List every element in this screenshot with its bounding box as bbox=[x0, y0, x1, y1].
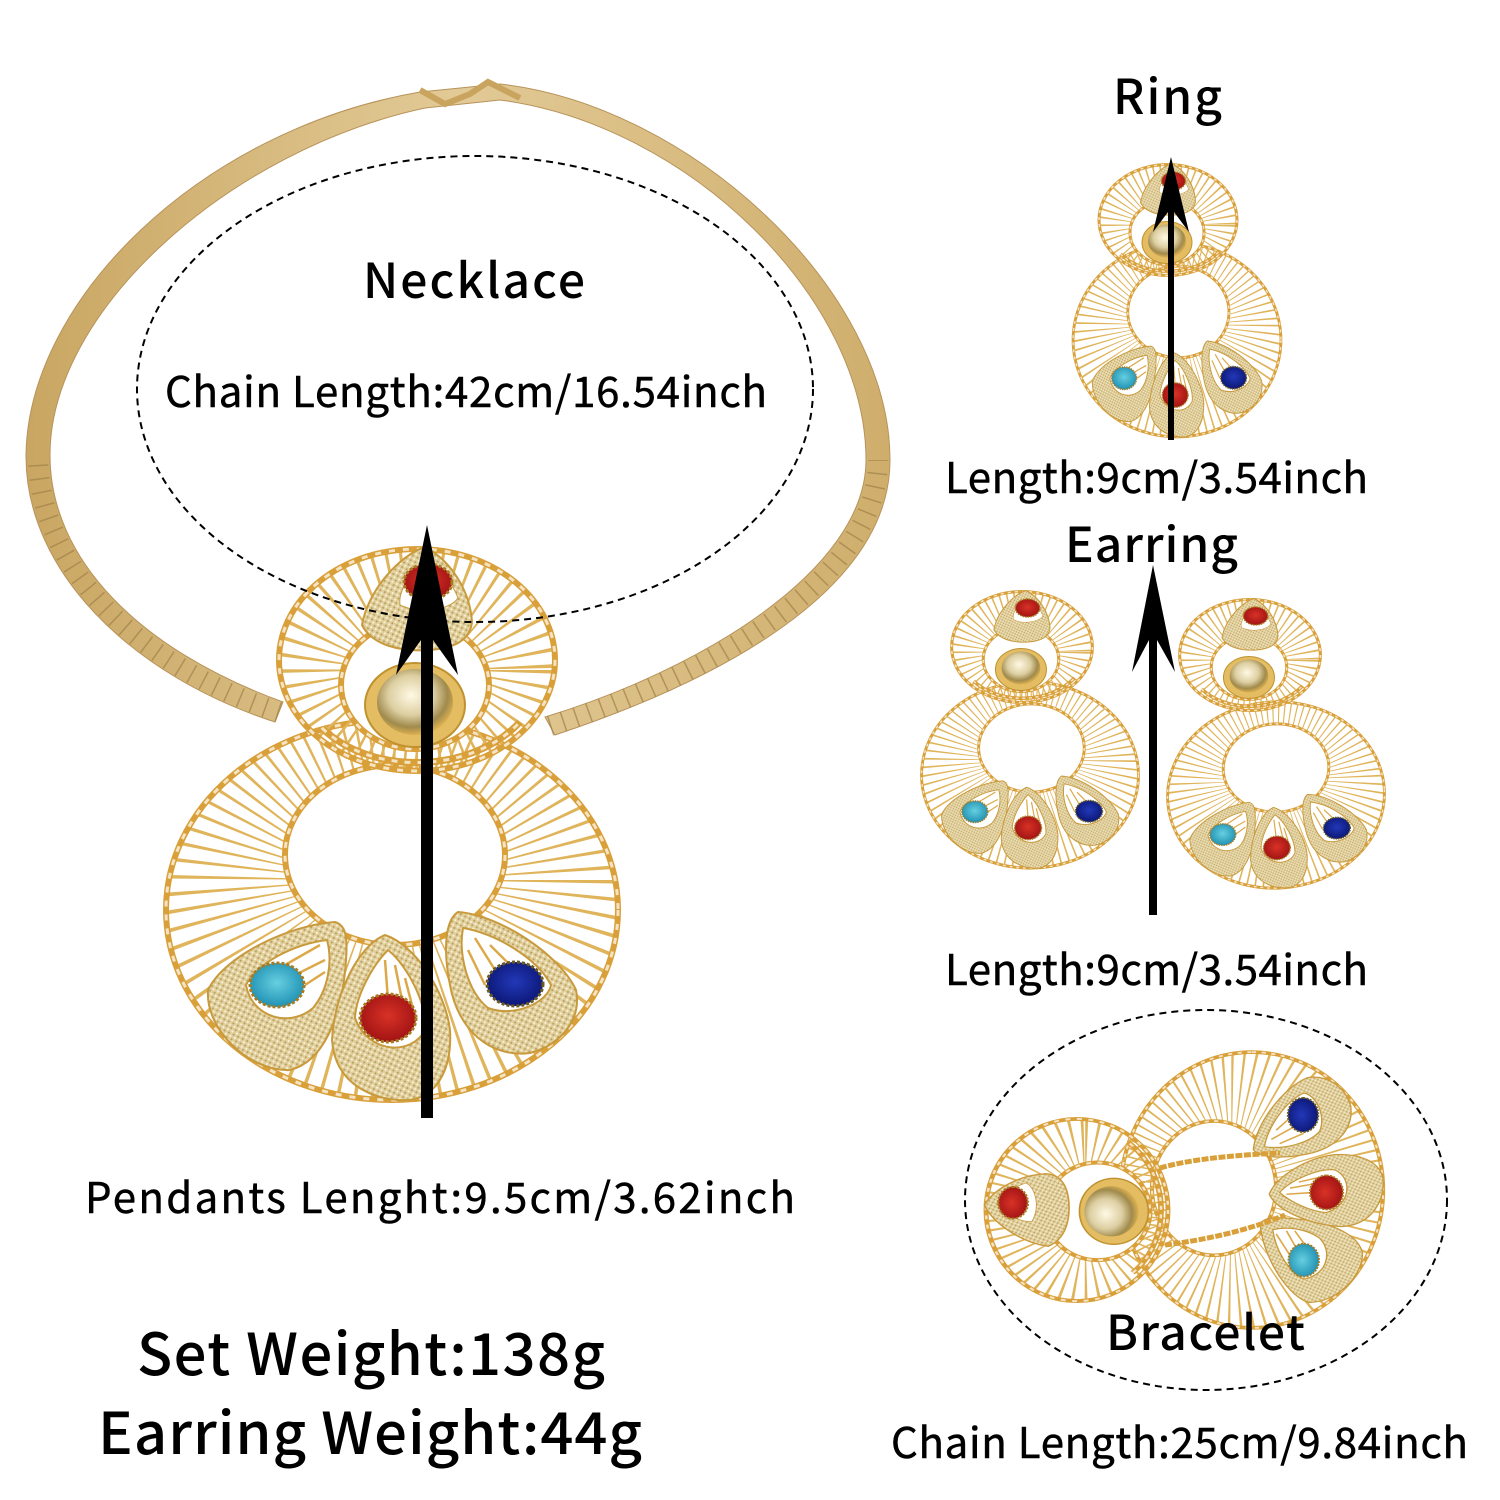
arrow: ring length bbox=[1153, 157, 1189, 440]
heading: necklace: Necklace bbox=[363, 242, 585, 312]
set weight: Set Weight:138g bbox=[137, 1308, 605, 1392]
arrow: earring length bbox=[1132, 565, 1175, 915]
dashed ellipse around necklace label bbox=[137, 156, 813, 622]
ring length label: Length:9cm/3.54inch bbox=[945, 445, 1368, 506]
pendant length label: Pendants Lenght:9.5cm/3.62inch bbox=[85, 1165, 795, 1226]
earring length label: Length:9cm/3.54inch bbox=[945, 937, 1368, 998]
heading: earring: Earring bbox=[1065, 506, 1238, 576]
arrow: pendant length bbox=[396, 525, 458, 1118]
left earring bbox=[922, 590, 1138, 868]
heading: ring: Ring bbox=[1113, 58, 1222, 128]
earring weight: Earring Weight:44g bbox=[98, 1387, 642, 1471]
heading: bracelet: Bracelet bbox=[1106, 1294, 1305, 1364]
right earring bbox=[1163, 598, 1389, 894]
pendant bbox=[166, 547, 618, 1100]
necklace chain length: Chain Length:42cm/16.54inch bbox=[165, 359, 767, 420]
ring piece bbox=[1073, 164, 1281, 437]
bracelet chain length: Chain Length:25cm/9.84inch bbox=[891, 1410, 1468, 1471]
necklace choker bbox=[26, 82, 890, 735]
dashed ellipse around bracelet bbox=[965, 1010, 1447, 1390]
bracelet piece bbox=[984, 1052, 1383, 1328]
